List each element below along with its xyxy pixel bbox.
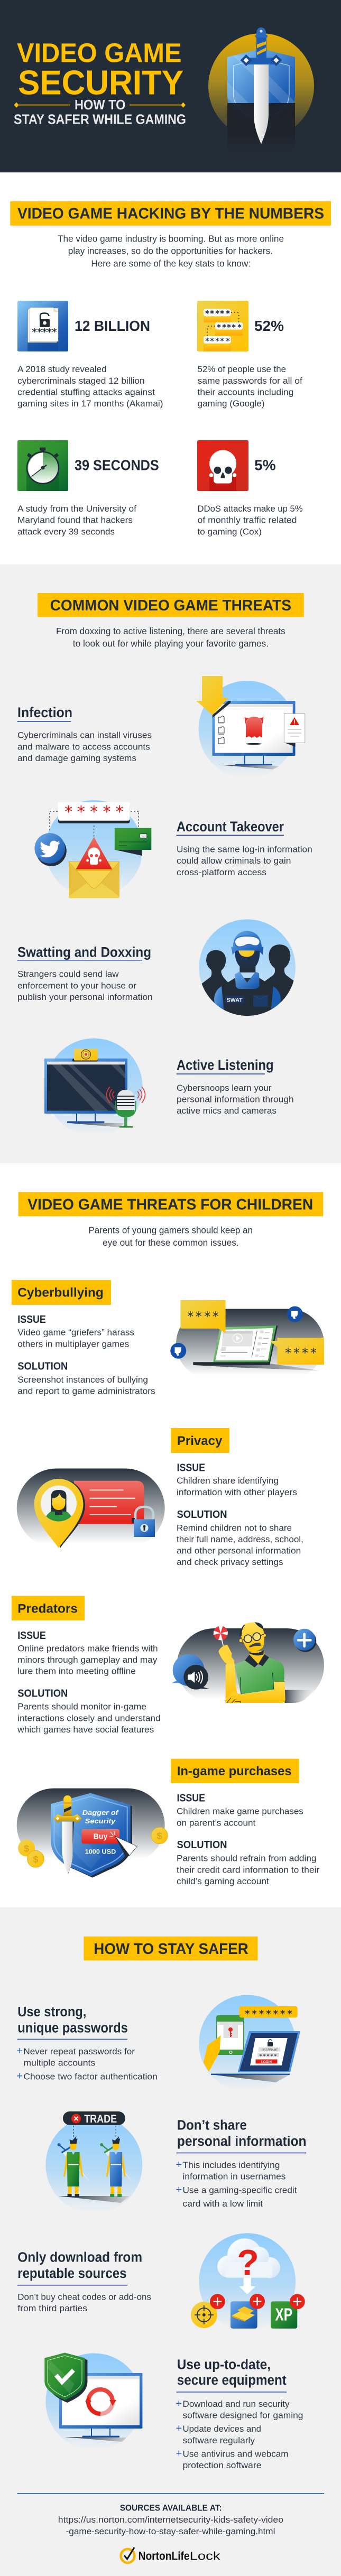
- card: predators: [12, 1596, 161, 1735]
- card: privacy: information with other players: [177, 1488, 297, 1497]
- threat: active listening: active mics and cameras: [177, 1106, 277, 1116]
- intro text: Here are some of the key stats to know:: [91, 258, 251, 268]
- tip: strong passwords: +: [17, 2045, 23, 2057]
- threat: account takeover: Account Takeover: [177, 819, 284, 835]
- threat: infection: and damage gaming systems: [17, 754, 136, 763]
- threat: swatting and doxxing: enforcement to your house or: [17, 981, 137, 990]
- card: predators: interactions closely and understand: [17, 1713, 161, 1723]
- stat: 12 billion: A 2018 study revealed: [17, 365, 107, 374]
- stat: 5 percent: DDoS attacks make up 5%: [198, 504, 303, 514]
- tip: secure equipment: protection software: [183, 2461, 261, 2470]
- intro text: to look out for while playing your favorite games.: [73, 638, 269, 649]
- tip: secure equipment: +: [176, 2423, 182, 2434]
- icon: in-game dagger purchase: Buy: [94, 1832, 108, 1841]
- intro text: The video game industry is booming. But as more online: [58, 233, 284, 244]
- stat: 12 billion: gaming sites in 17 months (Akamai): [17, 399, 163, 409]
- icon: phone and laptop login: *******: [245, 2008, 292, 2019]
- stat: 39 seconds: 39 SECONDS: [75, 457, 159, 474]
- threat: swatting and doxxing: publish your personal information: [17, 993, 153, 1002]
- heading: [38, 593, 304, 617]
- intro text: eye out for these common issues.: [103, 1237, 239, 1248]
- tip: personal information: Don’t share: [177, 2118, 247, 2133]
- sources: -game-security-how-to-stay-safer-while-gaming.html: [66, 2527, 275, 2536]
- icon: in-game dagger purchase: $: [24, 1843, 29, 1854]
- icon: gold bars: [231, 2301, 257, 2329]
- threat: active listening: personal information through: [177, 1095, 294, 1105]
- card: in-game purchases: [171, 1759, 320, 1886]
- icon: predator with lollipop: [172, 1622, 324, 1703]
- stat: 12 billion: 12 BILLION: [75, 318, 150, 334]
- tag: [12, 1280, 111, 1305]
- card: in-game purchases: child’s gaming account: [177, 1877, 269, 1886]
- card: in-game purchases: on parent’s account: [177, 1818, 256, 1828]
- icon: repeated passwords: [197, 301, 248, 351]
- card: predators: lure them into meeting offline: [17, 1667, 136, 1676]
- icon: cloud downloads: ?: [237, 2243, 259, 2283]
- icon: repeated passwords: *****: [205, 309, 230, 318]
- tip: secure equipment: +: [176, 2398, 182, 2410]
- tag: In-game purchases: [177, 1764, 292, 1778]
- icon: credentials document: *****: [32, 327, 57, 338]
- threat: swatting and doxxing: [17, 944, 153, 1002]
- icon: account takeover: [34, 800, 151, 898]
- icon: xp: [271, 2301, 297, 2329]
- icon: skull: [197, 440, 248, 491]
- title: [14, 38, 186, 127]
- icon: phone and laptop login: [199, 1995, 300, 2092]
- tip: personal information: card with a low limit: [183, 2199, 263, 2209]
- trade label: [63, 2111, 125, 2125]
- threat: infection: Infection: [17, 705, 72, 720]
- icon: comment bubble: ****: [187, 1309, 219, 1324]
- icon: no trade figures: [45, 2111, 142, 2213]
- card: privacy: Remind children not to share: [177, 1523, 292, 1533]
- panel: video game hacking by the numbers: [10, 201, 331, 536]
- heading: [19, 1192, 323, 1216]
- icon: phone and laptop login: LOGIN: [261, 2060, 272, 2064]
- heading: HOW TO STAY SAFER: [94, 1941, 248, 1958]
- stat: 12 billion: credential stuffing attacks against: [17, 387, 155, 397]
- stat: 12 billion: [17, 301, 163, 409]
- card: privacy: and other personal information: [177, 1546, 301, 1556]
- icon: shield and dagger: [208, 27, 314, 144]
- tip: reputable sources: reputable sources: [17, 2266, 126, 2281]
- figure: blue character: [100, 2136, 133, 2197]
- tip: secure equipment: Update devices and: [183, 2424, 261, 2434]
- tip: secure equipment: software regularly: [183, 2436, 255, 2445]
- logo: nortonlifelock: [121, 2547, 221, 2563]
- card: predators: ISSUE: [17, 1630, 46, 1642]
- stat: 52 percent: [197, 301, 302, 409]
- stat: 39 seconds: A study from the University of: [17, 504, 136, 514]
- tag: [171, 1759, 299, 1783]
- tip: secure equipment: secure equipment: [177, 2373, 287, 2388]
- heading: VIDEO GAME THREATS FOR CHILDREN: [27, 1197, 313, 1213]
- stat: 52 percent: 52% of people use the: [198, 365, 286, 374]
- threat: account takeover: [177, 819, 312, 877]
- icon: xp: XP: [275, 2304, 292, 2324]
- sources: https://us.norton.com/internetsecurity-kids-safety-video: [58, 2515, 283, 2525]
- stat: 5 percent: [197, 440, 303, 536]
- tip: strong passwords: [17, 2005, 158, 2082]
- stat: 5 percent: 5%: [254, 457, 276, 474]
- tip: reputable sources: Don’t buy cheat codes or add-ons: [17, 2293, 151, 2302]
- icon: comment bubble: [270, 1338, 324, 1365]
- icon: comment bubble: [180, 1300, 226, 1333]
- heading: VIDEO GAME HACKING BY THE NUMBERS: [17, 205, 324, 222]
- card: privacy: [171, 1428, 303, 1567]
- heading: [84, 1936, 258, 1960]
- threat: infection: Cybercriminals can install viruses: [17, 731, 152, 740]
- tip: strong passwords: unique passwords: [17, 2021, 128, 2035]
- icon: updated protected monitor: [44, 2353, 142, 2450]
- card: in-game purchases: Parents should refrain from adding: [177, 1854, 316, 1864]
- icon: in-game dagger purchase: $: [157, 1831, 162, 1841]
- tip: strong passwords: Never repeat passwords for: [23, 2047, 135, 2056]
- icon: credentials document: [17, 301, 68, 351]
- intro text: From doxxing to active listening, there are several threats: [56, 626, 285, 636]
- intro text: [58, 233, 284, 268]
- tip: secure equipment: +: [176, 2448, 182, 2459]
- tip: personal information: information in usernames: [183, 2172, 285, 2182]
- threat: account takeover: cross-platform access: [177, 868, 266, 877]
- stat: 52 percent: same passwords for all of: [198, 376, 302, 386]
- tip: secure equipment: Use up-to-date,: [177, 2358, 271, 2373]
- icon: repeated passwords: *****: [205, 336, 230, 346]
- intro text: [88, 1225, 253, 1248]
- card: in-game purchases: Children make game purchases: [177, 1806, 303, 1816]
- stat: 5 percent: of monthly traffic related: [198, 516, 297, 525]
- card: predators: Parents should monitor in-game: [17, 1702, 146, 1712]
- icon: in-game dagger purchase: [17, 1789, 168, 1878]
- icon: comment bubble: ****: [285, 1346, 317, 1360]
- tag: [171, 1428, 229, 1453]
- stat: 52 percent: gaming (Google): [198, 399, 265, 409]
- panel: header: [0, 0, 341, 172]
- threat: infection: [17, 705, 152, 763]
- icon: cloud downloads: [191, 2233, 305, 2330]
- card: predators: Online predators make friends with: [17, 1644, 158, 1653]
- threat: swatting and doxxing: Swatting and Doxxing: [17, 944, 151, 960]
- card: privacy: and check privacy settings: [177, 1558, 283, 1567]
- intro text: Parents of young gamers should keep an: [88, 1225, 253, 1236]
- heading: COMMON VIDEO GAME THREATS: [50, 597, 291, 614]
- threat: account takeover: Using the same log-in information: [177, 845, 312, 854]
- tip: personal information: This includes identifying: [183, 2161, 280, 2170]
- stat: 39 seconds: [17, 440, 159, 536]
- stat: 39 seconds: attack every 39 seconds: [17, 527, 115, 536]
- tip: personal information: [176, 2118, 307, 2209]
- figure: green character: [58, 2136, 90, 2197]
- tag: Predators: [17, 1601, 78, 1616]
- tip: personal information: personal information: [177, 2134, 307, 2149]
- icon: crosshair: [191, 2302, 217, 2328]
- threat: swatting and doxxing: Strangers could send law: [17, 970, 119, 979]
- stat: 5 percent: to gaming (Cox): [198, 527, 262, 536]
- tip: secure equipment: Download and run security: [183, 2399, 290, 2409]
- tag: Cyberbullying: [17, 1286, 104, 1300]
- card: privacy: their full name, address, school,: [177, 1535, 303, 1544]
- tip: reputable sources: Only download from: [17, 2250, 142, 2265]
- tip: secure equipment: Use antivirus and webcam: [183, 2449, 289, 2459]
- logo: nortonlifelock: NortonLife: [139, 2549, 190, 2562]
- panel: how to stay safer: [0, 1907, 341, 2576]
- tip: personal information: Use a gaming-specific credit: [183, 2185, 297, 2195]
- icon: thumbs down: [170, 1343, 186, 1359]
- card: cyberbullying: SOLUTION: [17, 1361, 68, 1373]
- tip: strong passwords: Choose two factor authentication: [23, 2072, 158, 2081]
- tag: Privacy: [177, 1434, 223, 1448]
- sources: [58, 2503, 283, 2536]
- card: cyberbullying: and report to game administrators: [17, 1387, 155, 1396]
- icon: account takeover: *****: [64, 803, 124, 821]
- icon: in-game dagger purchase: Dagger of: [82, 1809, 119, 1817]
- icon: thumbs down: [287, 1306, 303, 1322]
- icon: phone and laptop login: *****: [260, 2054, 277, 2059]
- icon: in-game dagger purchase: 1000 USD: [85, 1848, 116, 1855]
- logo: nortonlifelock: Lock: [190, 2549, 221, 2562]
- icon: phone and laptop login: USERNAME: [262, 2049, 279, 2052]
- stat: 52 percent: their accounts including: [198, 387, 293, 397]
- icon: infected monitor: [196, 676, 305, 778]
- icon: in-game dagger purchase: $: [33, 1854, 38, 1865]
- panel: common video game threats: [0, 564, 341, 1163]
- icon: repeated passwords: *****: [217, 322, 242, 332]
- stat: 12 billion: cybercriminals staged 12 billion: [17, 376, 145, 386]
- card: in-game purchases: ISSUE: [177, 1793, 205, 1804]
- card: privacy: Children share identifying: [177, 1476, 279, 1486]
- card: cyberbullying: Video game “griefers” harass: [17, 1328, 134, 1338]
- icon: identity pin: [17, 1468, 165, 1549]
- title: STAY SAFER WHILE GAMING: [14, 112, 186, 127]
- threat: active listening: Cybersnoops learn your: [177, 1083, 272, 1093]
- tip: secure equipment: [176, 2358, 303, 2470]
- icon: in-game dagger purchase: Security: [85, 1817, 116, 1825]
- tip: strong passwords: +: [17, 2070, 23, 2082]
- threat: active listening: [177, 1057, 294, 1116]
- sources: SOURCES AVAILABLE AT:: [120, 2503, 222, 2513]
- tip: reputable sources: [17, 2250, 151, 2313]
- intro text: [56, 626, 285, 649]
- card: in-game purchases: their credit card information to their: [177, 1865, 320, 1875]
- tip: strong passwords: Use strong,: [17, 2005, 86, 2019]
- panel: video game threats for children: [12, 1192, 324, 1886]
- card: predators: which games have social features: [17, 1725, 154, 1735]
- intro text: play increases, so do the opportunities for hackers.: [68, 246, 273, 256]
- icon: swat team: [199, 919, 296, 1017]
- title: HOW TO: [75, 97, 125, 113]
- title: SECURITY: [18, 63, 183, 101]
- tip: reputable sources: from third parties: [17, 2304, 87, 2313]
- card: predators: SOLUTION: [17, 1688, 68, 1700]
- tip: secure equipment: software designed for gaming: [183, 2411, 303, 2421]
- tip: personal information: +: [176, 2184, 182, 2195]
- card: predators: minors through gameplay and may: [17, 1655, 158, 1665]
- tag: [12, 1596, 85, 1620]
- card: privacy: SOLUTION: [177, 1509, 227, 1521]
- icon: webcam monitor and microphone: [44, 1039, 145, 1136]
- title: VIDEO GAME: [17, 38, 182, 68]
- tip: strong passwords: multiple accounts: [23, 2059, 95, 2068]
- icon: laptop with insulting comments: [170, 1300, 324, 1378]
- card: cyberbullying: [12, 1280, 155, 1396]
- card: cyberbullying: others in multiplayer games: [17, 1339, 129, 1349]
- heading: [10, 201, 331, 226]
- stat: 52 percent: 52%: [254, 318, 284, 334]
- icon: stopwatch: [17, 440, 68, 491]
- tip: personal information: +: [176, 2159, 182, 2171]
- threat: infection: and malware to access accounts: [17, 742, 150, 752]
- card: cyberbullying: ISSUE: [17, 1314, 46, 1326]
- card: cyberbullying: Screenshot instances of bullying: [17, 1375, 148, 1385]
- threat: active listening: Active Listening: [177, 1057, 274, 1073]
- card: in-game purchases: SOLUTION: [177, 1839, 227, 1851]
- threat: account takeover: could allow criminals to gain: [177, 856, 291, 866]
- card: privacy: ISSUE: [177, 1462, 205, 1474]
- stat: 39 seconds: Maryland found that hackers: [17, 516, 133, 525]
- trade label: TRADE: [84, 2113, 117, 2125]
- icon: swat team: SWAT: [227, 997, 243, 1003]
